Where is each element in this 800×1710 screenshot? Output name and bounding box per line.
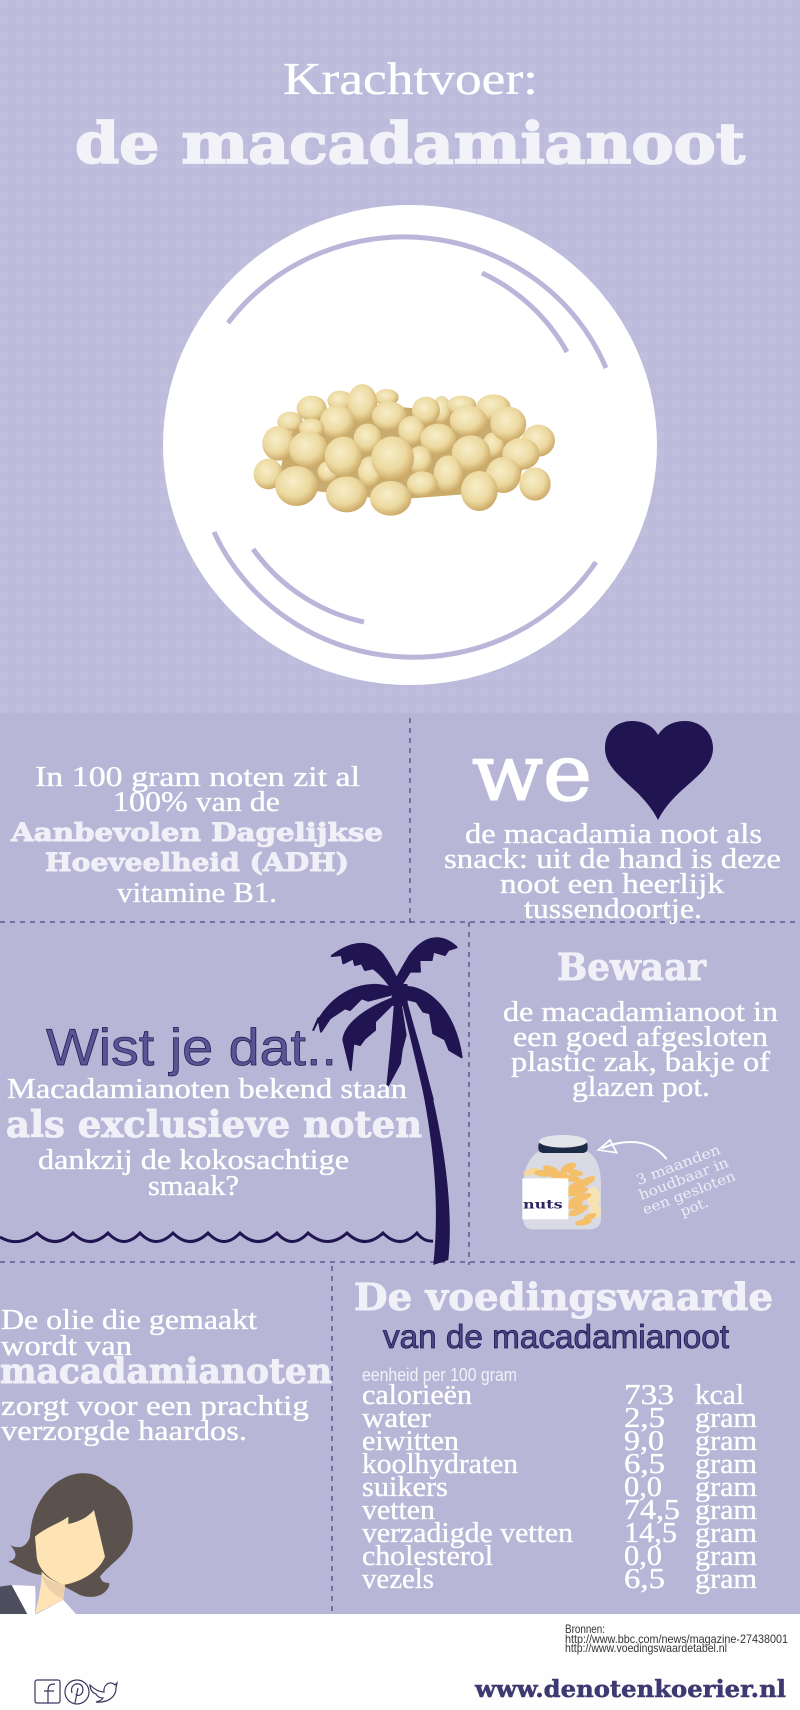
oil text: De olie die gemaakt bbox=[1, 1305, 257, 1336]
nutrition table: cholesterol bbox=[362, 1541, 493, 1572]
snack text: snack: uit de hand is deze bbox=[444, 844, 781, 875]
icon: jar of nuts bbox=[522, 1135, 601, 1229]
title line: Krachtvoer: Krachtvoer: bbox=[283, 53, 538, 104]
panel: vitamine B1 text: Aanbevolen Dagelijkse bbox=[10, 818, 383, 847]
white plate circle bbox=[163, 205, 657, 685]
nutrition table: kcal bbox=[695, 1380, 744, 1411]
lower panel background bbox=[0, 713, 800, 1614]
website: www.denotenkoerier.nl bbox=[474, 1676, 786, 1703]
panel: bewaar bbox=[503, 945, 778, 1232]
top plaid background bbox=[0, 0, 800, 713]
plate arcs bbox=[214, 237, 606, 657]
nutrition table: gram bbox=[695, 1403, 757, 1434]
icon: woman with hair bbox=[0, 1473, 133, 1614]
oil text: macadamianoten bbox=[0, 1351, 332, 1392]
wist je dat body text bbox=[6, 1074, 422, 1202]
nutrition table: verzadigde vetten bbox=[362, 1518, 573, 1549]
nutrition table: gram bbox=[695, 1564, 757, 1595]
oil text: verzorgde haardos. bbox=[1, 1416, 247, 1447]
snack text: de macadamia noot als bbox=[465, 819, 762, 850]
nutrition table: 0,0 bbox=[624, 1472, 662, 1503]
heading: Wist je dat: Wist je dat.. bbox=[46, 1019, 337, 1077]
nutrition table: eiwitten bbox=[362, 1426, 459, 1457]
panel: vitamine B1 text: 100% van de bbox=[113, 787, 280, 818]
nutrition table: gram bbox=[695, 1518, 757, 1549]
wist je dat body text: dankzij de kokosachtige bbox=[38, 1145, 349, 1176]
nutrition table: vezels bbox=[362, 1564, 434, 1595]
nutrition table: koolhydraten bbox=[362, 1449, 518, 1480]
panel: vitamine B1 text: In 100 gram noten zit al bbox=[35, 762, 360, 793]
footer background bbox=[0, 1614, 800, 1710]
waves bbox=[0, 1233, 433, 1242]
sources: Bronnen: bbox=[565, 1622, 605, 1636]
arrow to jar bbox=[598, 1140, 667, 1159]
wist je dat body text: als exclusieve noten bbox=[6, 1104, 422, 1146]
nutrition table: calorieën bbox=[362, 1380, 472, 1411]
nutrition table: gram bbox=[695, 1426, 757, 1457]
nutrition table: 0,0 bbox=[624, 1541, 662, 1572]
sources bbox=[565, 1622, 788, 1655]
panel: vitamine B1 text: vitamine B1. bbox=[117, 878, 277, 909]
social icons bbox=[35, 1680, 117, 1704]
bewaar body text bbox=[503, 997, 778, 1103]
nutrition table bbox=[362, 1380, 757, 1595]
nutrition table: 733 bbox=[624, 1380, 674, 1411]
nutrition table: vetten bbox=[362, 1495, 435, 1526]
dashed dividers bbox=[0, 718, 800, 1614]
subheading: van de macadamianoot bbox=[383, 1318, 729, 1355]
nutrition table: gram bbox=[695, 1541, 757, 1572]
nutrition table: suikers bbox=[362, 1472, 448, 1503]
wist je dat body text: Macadamianoten bekend staan bbox=[7, 1074, 407, 1105]
nutrition table: 6,5 bbox=[624, 1449, 665, 1480]
bewaar body text: een goed afgesloten bbox=[513, 1022, 768, 1053]
snack text bbox=[444, 819, 781, 925]
shelf life note bbox=[630, 1140, 743, 1232]
macadamia nuts pile bbox=[254, 384, 555, 516]
bewaar body text: de macadamianoot in bbox=[503, 997, 778, 1028]
nutrition table: gram bbox=[695, 1495, 757, 1526]
bewaar body text: plastic zak, bakje of bbox=[511, 1047, 771, 1078]
sources: http://www.voedingswaardetabel.nl bbox=[565, 1641, 727, 1655]
panel: we love snack bbox=[444, 721, 781, 925]
icon: heart bbox=[605, 721, 713, 820]
oil text bbox=[0, 1305, 332, 1447]
footer bbox=[35, 1622, 788, 1704]
shelf life note: een gesloten bbox=[641, 1168, 738, 1218]
palm tree bbox=[313, 938, 462, 1265]
title bbox=[75, 53, 745, 177]
nutrition table: 74,5 bbox=[624, 1495, 680, 1526]
oil text: zorgt voor een prachtig bbox=[1, 1391, 309, 1422]
icon: jar of nuts: nuts bbox=[523, 1197, 563, 1211]
panel: vitamine B1 text bbox=[10, 762, 383, 909]
nutrition table: water bbox=[362, 1403, 432, 1434]
wist je dat body text: smaak? bbox=[148, 1171, 239, 1202]
panel: vitamine B1 text: Hoeveelheid (ADH) bbox=[45, 848, 349, 877]
title line: de macadamianoot: de macadamianoot bbox=[75, 111, 745, 177]
nutrition table: 2,5 bbox=[624, 1403, 665, 1434]
oil text: wordt van bbox=[1, 1331, 132, 1362]
nutrition table: 6,5 bbox=[624, 1564, 665, 1595]
hero plate with nuts bbox=[163, 205, 657, 685]
nutrition table: gram bbox=[695, 1472, 757, 1503]
panel: wist je dat bbox=[0, 938, 462, 1265]
panel: olie haardos bbox=[0, 1305, 332, 1614]
snack text: tussendoortje. bbox=[524, 894, 702, 925]
unit note: eenheid per 100 gram bbox=[362, 1365, 517, 1385]
nutrition table: 14,5 bbox=[624, 1518, 677, 1549]
snack text: noot een heerlijk bbox=[500, 869, 724, 900]
nutrition table: gram bbox=[695, 1449, 757, 1480]
shelf life note: 3 maanden bbox=[634, 1142, 723, 1189]
word: we: we bbox=[472, 729, 592, 819]
shelf life note: houdbaar in bbox=[637, 1155, 731, 1204]
shelf life note: pot. bbox=[678, 1195, 711, 1220]
panel: voedingswaarde bbox=[354, 1275, 773, 1595]
bewaar body text: glazen pot. bbox=[572, 1072, 710, 1103]
nutrition table: 9,0 bbox=[624, 1426, 664, 1457]
heading: Bewaar: Bewaar bbox=[557, 945, 706, 989]
heading: De voedingswaarde: De voedingswaarde bbox=[354, 1275, 773, 1319]
